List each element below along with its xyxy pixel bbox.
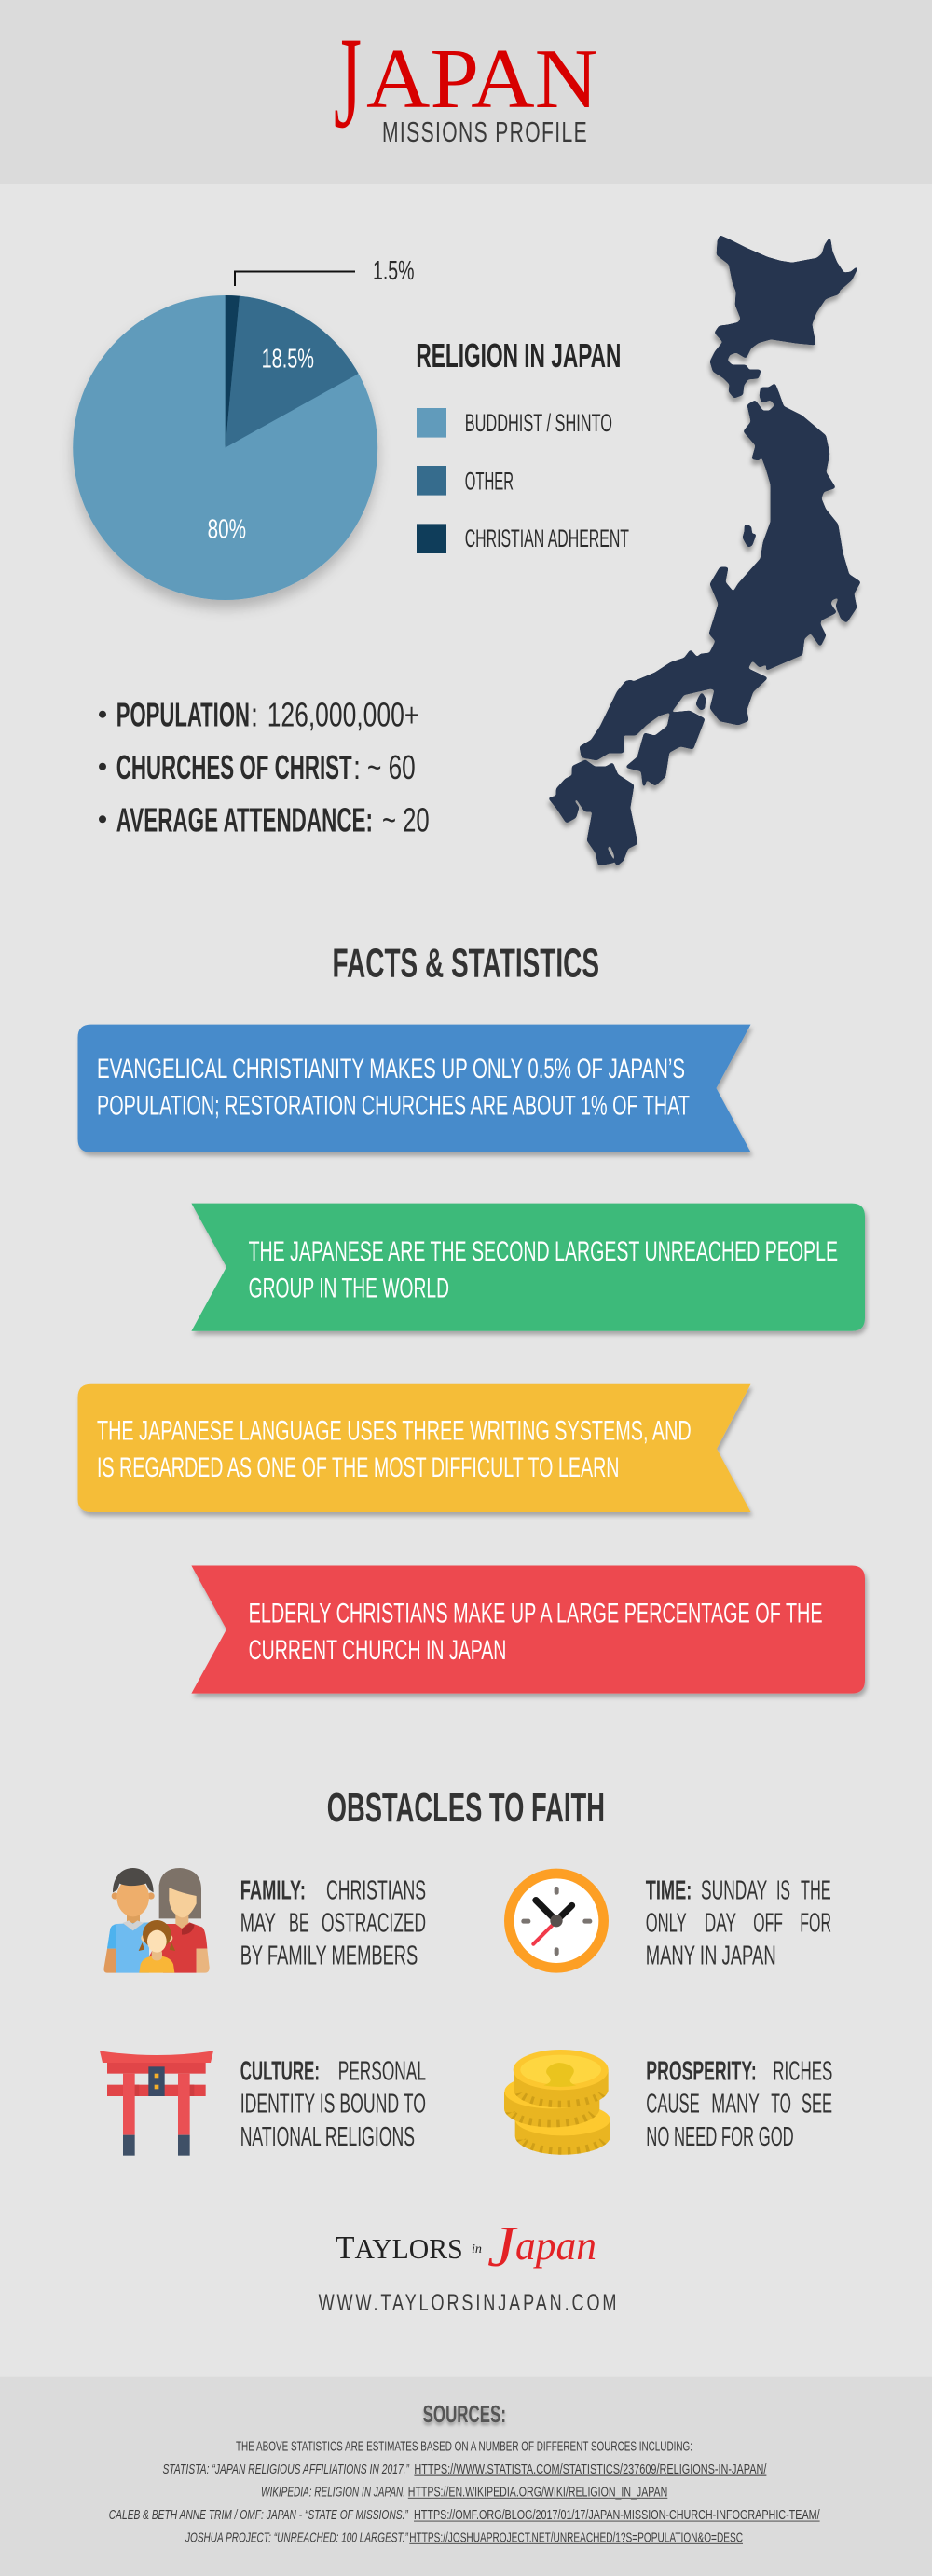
icon: torii gate — [100, 2051, 213, 2156]
sources list: THE ABOVE STATISTICS ARE ESTIMATES BASED ON A NUMBER OF DIFFERENT SOURCES INCLUDING: — [236, 2439, 692, 2455]
text: time obstacle: IS — [776, 1875, 790, 1905]
sources list: HTTPS://WWW.STATISTA.COM/STATISTICS/237609/RELIGIONS-IN-JAPAN/ — [414, 2461, 767, 2477]
legend: OTHER — [465, 468, 514, 496]
ribbon: elderly Christians fact — [191, 1565, 865, 1694]
text: time obstacle: MANY IN JAPAN — [646, 1942, 776, 1971]
text: time obstacle: TIME: — [646, 1875, 692, 1905]
text: prosperity obstacle: PROSPERITY: — [646, 2057, 757, 2087]
key statistics: ~ 20 — [382, 800, 430, 838]
title — [334, 10, 598, 156]
callout: 1.5% — [235, 256, 414, 286]
text: family obstacle: BE — [289, 1908, 309, 1938]
title: J — [334, 10, 362, 156]
text: time obstacle: OFF — [753, 1908, 783, 1938]
ribbon: evangelical fact — [78, 1025, 751, 1152]
sources list — [109, 2439, 820, 2545]
text: culture obstacle: PERSONAL — [338, 2057, 426, 2087]
pie chart: religion in Japan: 18.5% — [262, 345, 314, 375]
callout: 1.5%: 1.5% — [373, 256, 414, 286]
ribbon: language fact: IS REGARDED AS ONE OF THE MOST DIFFICULT TO LEARN — [97, 1452, 619, 1483]
key statistics: AVERAGE ATTENDANCE: — [116, 800, 373, 838]
key statistics: 126,000,000+ — [267, 695, 418, 733]
ribbon: language fact — [78, 1384, 751, 1512]
map of Japan — [550, 237, 859, 865]
text: time obstacle — [646, 1875, 831, 1971]
logo: Taylors in Japan — [336, 2215, 596, 2279]
key statistics: : — [251, 695, 258, 733]
text: family obstacle: CHRISTIANS — [326, 1875, 426, 1905]
text: prosperity obstacle: NO NEED FOR GOD — [646, 2122, 794, 2152]
logo: Taylors in Japan: TAYLORS — [336, 2229, 463, 2266]
icon: family — [103, 1868, 210, 1973]
text: time obstacle: THE — [801, 1875, 831, 1905]
logo: Taylors in Japan: apan — [515, 2223, 596, 2269]
text: prosperity obstacle: MANY — [711, 2090, 760, 2119]
website address: WWW.TAYLORSINJAPAN.COM — [319, 2290, 619, 2316]
icon: gold coins — [504, 2050, 610, 2159]
text: family obstacle — [240, 1875, 426, 1971]
icon: clock — [504, 1869, 609, 1973]
text: family obstacle: BY FAMILY MEMBERS — [240, 1942, 418, 1971]
text: culture obstacle: NATIONAL RELIGIONS — [240, 2122, 415, 2152]
ribbon: elderly Christians fact: CURRENT CHURCH IN JAPAN — [249, 1635, 506, 1666]
text: time obstacle: FOR — [800, 1908, 831, 1938]
text: time obstacle: ONLY — [646, 1908, 687, 1938]
sources list: JOSHUA PROJECT: “UNREACHED: 100 LARGEST.” — [185, 2529, 408, 2545]
legend: BUDDHIST / SHINTO — [465, 409, 612, 437]
subtitle: MISSIONS PROFILE — [382, 116, 588, 148]
text: family obstacle: MAY — [240, 1908, 276, 1938]
text: culture obstacle — [240, 2057, 426, 2152]
sources list: STATISTA: “JAPAN RELIGIOUS AFFILIATIONS IN 2017.” — [162, 2461, 410, 2477]
key statistics — [99, 695, 430, 838]
text: prosperity obstacle: TO — [771, 2090, 791, 2119]
legend — [417, 408, 629, 553]
sources list: WIKIPEDIA: RELIGION IN JAPAN. — [261, 2484, 405, 2500]
sources list: HTTPS://EN.WIKIPEDIA.ORG/WIKI/RELIGION_IN_JAPAN — [408, 2484, 667, 2500]
logo: Taylors in Japan: J — [487, 2215, 518, 2279]
pie chart: religion in Japan: 80% — [208, 514, 246, 544]
text: prosperity obstacle: SEE — [802, 2090, 832, 2119]
text: family obstacle: FAMILY: — [240, 1875, 306, 1905]
footer band — [0, 2377, 932, 2576]
legend: CHRISTIAN ADHERENT — [465, 525, 629, 552]
title: APAN — [366, 32, 598, 126]
text: family obstacle: OSTRACIZED — [322, 1908, 426, 1938]
key statistics: : — [353, 748, 361, 786]
ribbon: unreached people group fact: GROUP IN THE WORLD — [249, 1273, 449, 1304]
text: prosperity obstacle: RICHES — [773, 2057, 832, 2087]
key statistics: CHURCHES OF CHRIST — [116, 748, 352, 786]
logo: Taylors in Japan: in — [472, 2242, 482, 2256]
text: time obstacle: DAY — [705, 1908, 736, 1938]
text: prosperity obstacle: CAUSE — [646, 2090, 700, 2119]
heading: facts and statistics: FACTS & STATISTICS — [332, 941, 599, 986]
text: culture obstacle: CULTURE: — [240, 2057, 320, 2087]
text: time obstacle: SUNDAY — [701, 1875, 767, 1905]
pie chart: religion in Japan — [73, 295, 377, 600]
heading: obstacles to faith: OBSTACLES TO FAITH — [327, 1786, 605, 1831]
sources list: CALEB & BETH ANNE TRIM / OMF: JAPAN - “STATE OF MISSIONS.” — [109, 2507, 408, 2523]
sources list: HTTPS://JOSHUAPROJECT.NET/UNREACHED/1?S=POPULATION&O=DESC — [409, 2529, 743, 2545]
key statistics: POPULATION — [116, 695, 250, 733]
ribbon: unreached people group fact — [191, 1204, 865, 1331]
legend heading: RELIGION IN JAPAN — [416, 336, 621, 375]
text: prosperity obstacle — [646, 2057, 832, 2152]
text: culture obstacle: IDENTITY IS BOUND TO — [240, 2090, 426, 2119]
key statistics: ~ 60 — [367, 748, 416, 786]
header band — [0, 0, 932, 184]
sources heading: SOURCES: — [423, 2400, 506, 2428]
